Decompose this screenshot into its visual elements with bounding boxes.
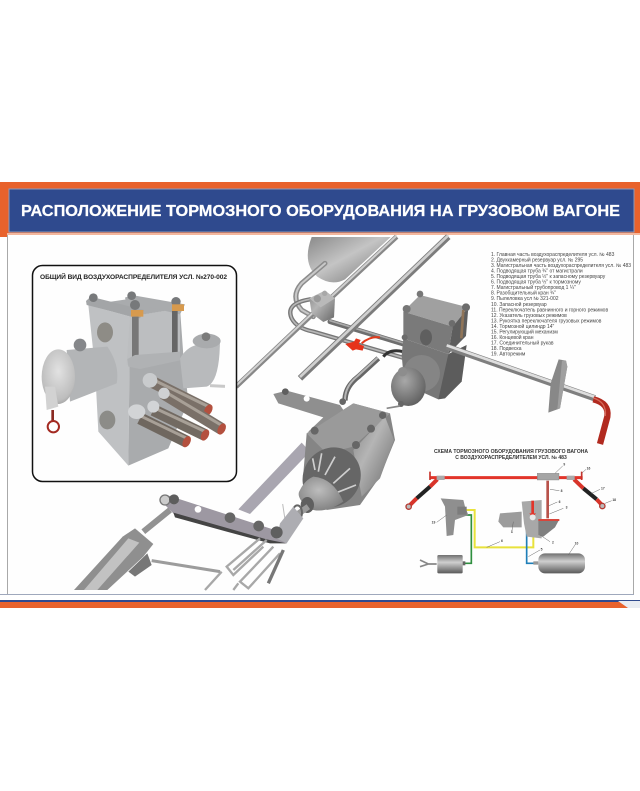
parts list: 14. Тормозной цилиндр 14" xyxy=(491,323,555,330)
main red line xyxy=(430,473,583,482)
parts list: 12. Указатель грузовых режимов xyxy=(491,313,567,319)
leader lines and numbers: 3 xyxy=(566,506,568,510)
title banner: РАСПОЛОЖЕНИЕ ТОРМОЗНОГО ОБОРУДОВАНИЯ НА ГРУЗОВОМ ВАГОНЕ xyxy=(21,203,620,220)
parts list: 1. Главная часть воздухораспределителя усл. № 483 xyxy=(491,252,615,258)
distributor body xyxy=(88,305,130,466)
inset heading: ОБЩИЙ ВИД ВОЗДУХОРАСПРЕДЕЛИТЕЛЯ УСЛ. №270-002 xyxy=(40,272,227,281)
parts list: 7. Магистральный трубопровод 1 ¼" xyxy=(491,284,576,291)
parts list: 5. Подводящая труба ½" к запасному резервуару xyxy=(491,273,606,280)
leader lines and numbers: 5 xyxy=(541,547,543,551)
brake equipment schematic xyxy=(406,462,616,573)
leader lines and numbers: 6 xyxy=(559,500,561,504)
parts list: 19. Авторежим xyxy=(491,352,526,358)
parts list: 8. Разобщительный кран ¾" xyxy=(491,290,556,297)
upper lever xyxy=(273,391,343,437)
top bolted plates xyxy=(86,297,144,318)
leader lines and numbers: 18 xyxy=(612,498,616,502)
inset panel: distributor view xyxy=(32,266,236,482)
parts list: 2. Двухкамерный резервуар усл. № 295 xyxy=(491,256,583,263)
leader lines and numbers: 10 xyxy=(575,542,579,546)
tee block xyxy=(309,291,335,322)
air distributor drawing xyxy=(42,291,228,466)
lower fork rods xyxy=(152,538,283,590)
push strip xyxy=(238,443,310,514)
title banner xyxy=(9,189,634,232)
brake cylinder xyxy=(420,555,465,573)
left actuator xyxy=(67,347,117,402)
schematic heading: СХЕМА ТОРМОЗНОГО ОБОРУДОВАНИЯ ГРУЗОВОГО ВАГОНА xyxy=(434,449,588,455)
bent pipes at tee xyxy=(290,263,407,358)
lower left brake pipe cylinder xyxy=(74,510,170,590)
parts list: 11. Переключатель равнинного и горного режимов xyxy=(491,307,608,313)
poster frame xyxy=(0,182,640,608)
red disconnect cock xyxy=(345,337,380,351)
parts list: 9. Пылеловка усл № 321-002 xyxy=(491,296,559,302)
leader lines and numbers: 9 xyxy=(563,462,565,466)
parts list: 4. Подводящая труба ¾" от магистрали xyxy=(491,268,583,274)
leader lines and numbers: 19 xyxy=(432,521,436,525)
pull handle with ring xyxy=(45,387,58,410)
main illustration: upper piping and air distributor xyxy=(236,235,470,408)
leader lines and numbers: 1 xyxy=(511,530,513,534)
leader lines and numbers xyxy=(432,462,616,557)
parts list: 16. Концевой кран xyxy=(491,334,534,341)
four outlet pipes xyxy=(128,373,228,449)
parts list: 15. Регулирующий механизм xyxy=(491,328,558,336)
main illustration: brake cylinder and levers xyxy=(74,388,395,590)
right hose xyxy=(574,479,605,509)
auto-mode device xyxy=(441,498,468,536)
parts list: 6. Подводящая труба ½" к тормозному xyxy=(491,279,581,286)
right fitting xyxy=(180,338,220,388)
parts list: 13. Рукоятка переключателя грузовых режимов xyxy=(491,318,602,324)
parts list: 17. Соединительный рукав xyxy=(491,340,554,347)
schematic heading xyxy=(434,449,588,461)
spare reservoir xyxy=(533,553,585,573)
flexible hose to cylinder xyxy=(345,351,403,401)
reservoir tank xyxy=(308,237,391,282)
long pipe and flange with red bent end xyxy=(447,345,608,444)
parts list: 10. Запасной резервуар xyxy=(491,301,547,308)
leader lines and numbers: 6 xyxy=(501,539,503,543)
branch pipe xyxy=(544,481,552,518)
yellow line xyxy=(465,510,533,547)
horizontal lever xyxy=(159,494,303,543)
parts list: 3. Магистральная часть воздухораспределителя усл. № 483 xyxy=(491,263,631,269)
leader lines and numbers: 16 xyxy=(587,466,591,470)
rod and clevis xyxy=(295,507,308,516)
cylinder body xyxy=(291,398,395,519)
diagonal pipes xyxy=(236,235,448,387)
leader lines and numbers: 8 xyxy=(561,489,563,493)
leader lines and numbers: 17 xyxy=(601,487,605,491)
dirt collector xyxy=(437,473,575,480)
air distributor xyxy=(387,291,470,408)
parts list xyxy=(491,252,631,358)
blue line xyxy=(527,520,537,563)
green line xyxy=(463,515,471,563)
schematic heading: С ВОЗДУХОРАСПРЕДЕЛИТЕЛЕМ УСЛ. № 483 xyxy=(455,455,567,461)
distributor xyxy=(498,500,559,538)
leader lines and numbers: 2 xyxy=(552,540,554,544)
left hose xyxy=(406,479,437,509)
parts list: 18. Подвеска xyxy=(491,346,522,352)
